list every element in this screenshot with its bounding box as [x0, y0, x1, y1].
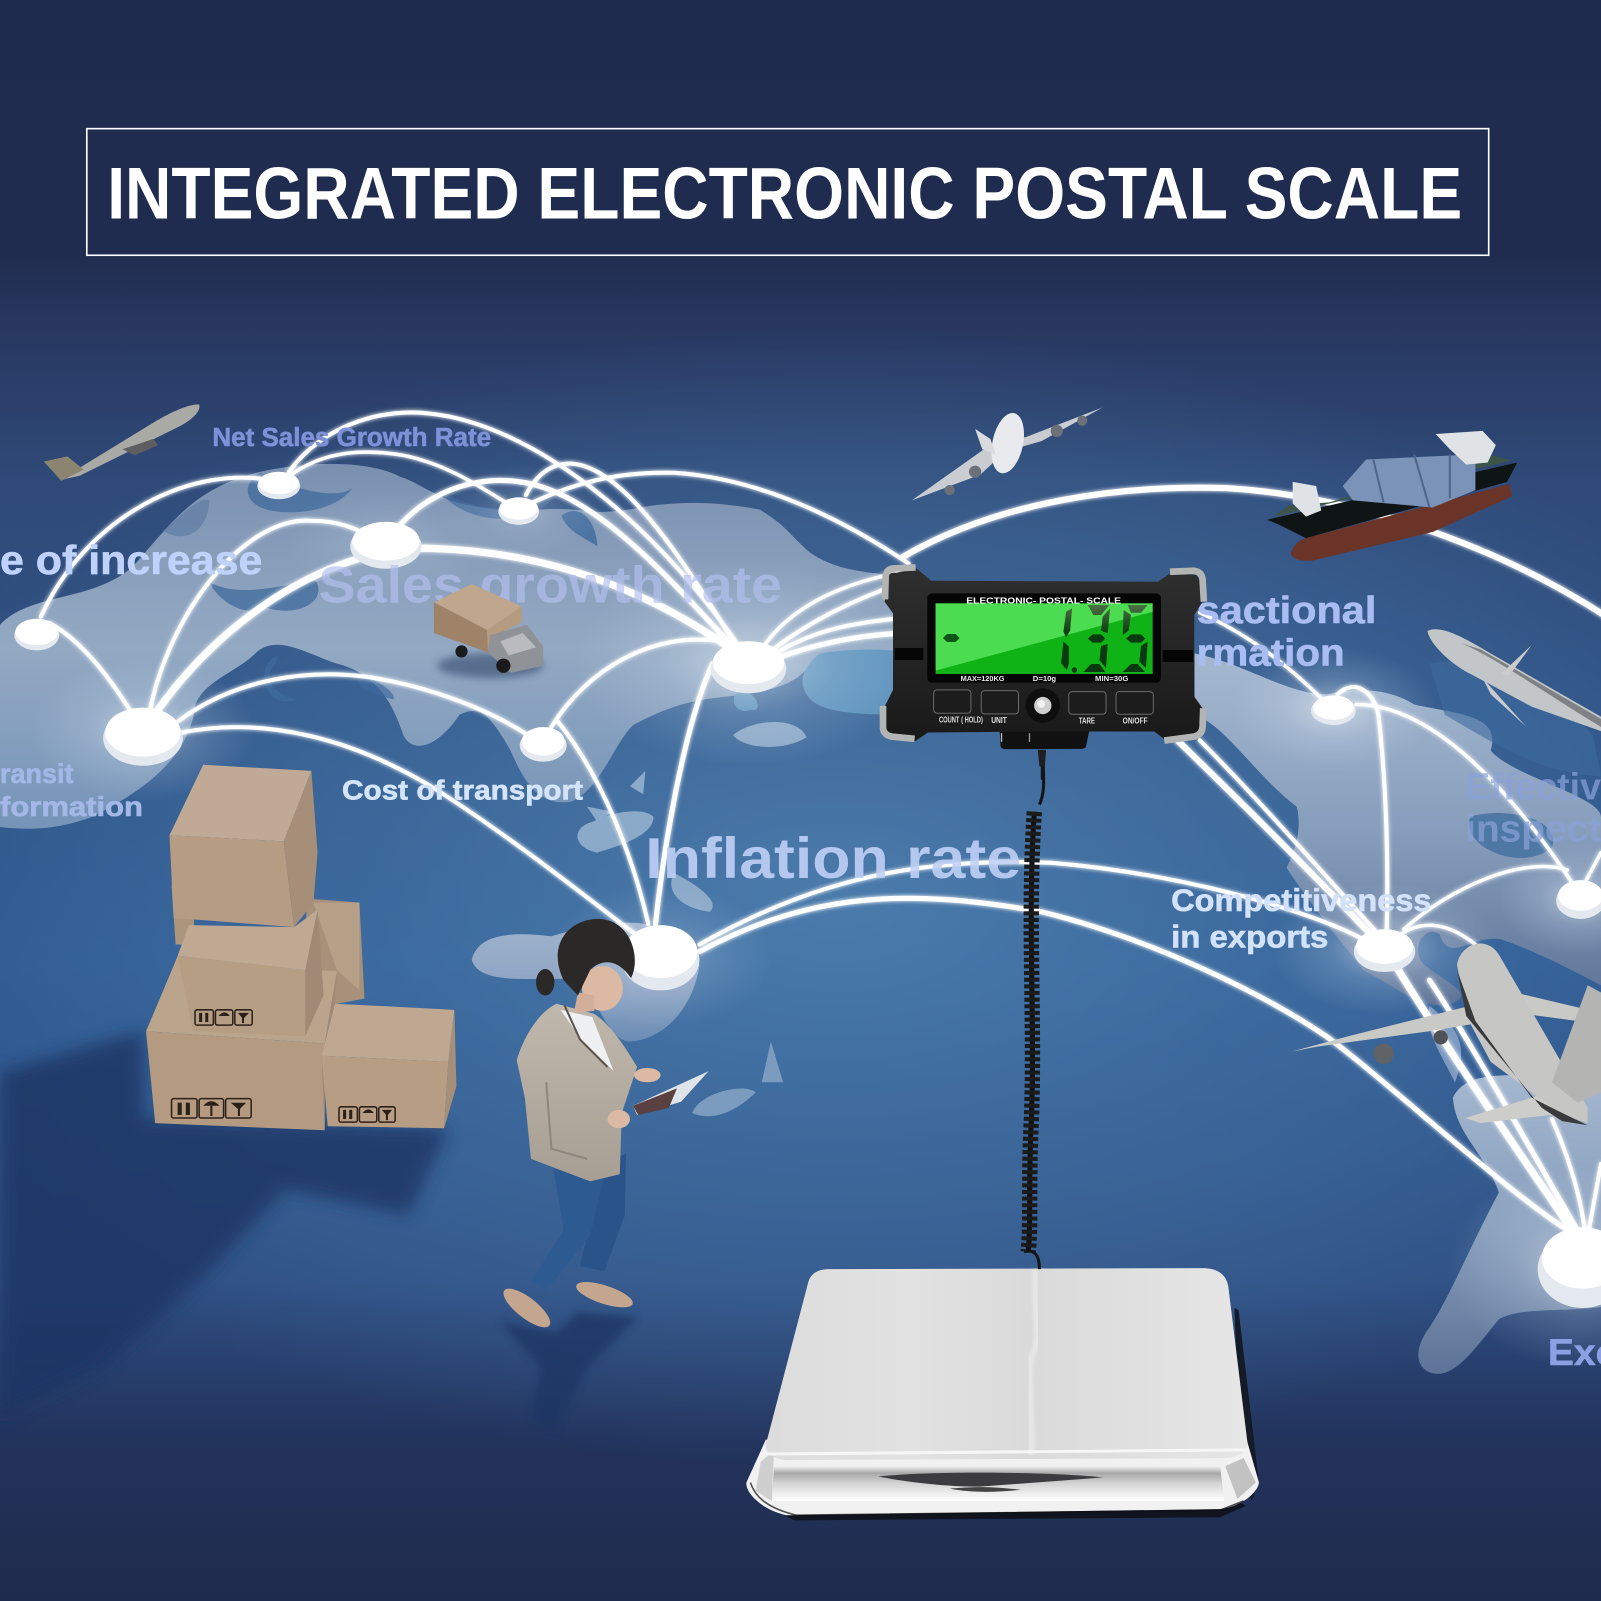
map labels: Effectiv: [1465, 766, 1601, 808]
map labels: Competitiveness: [1171, 882, 1432, 918]
title banner: [87, 129, 1489, 255]
map labels: in exports: [1171, 919, 1328, 955]
button labels: TARE: [1079, 716, 1095, 726]
icon: airplane top centre: [912, 407, 1103, 500]
icon: airplane top left: [44, 404, 199, 481]
map labels: e of increase: [0, 537, 262, 583]
corner bumpers: [883, 567, 1204, 741]
control buttons: [934, 690, 1153, 714]
coiled cable: [1024, 750, 1044, 1269]
network hub nodes: [14, 472, 1601, 1308]
map labels: inspect: [1465, 808, 1601, 850]
icon: large airplane: [1292, 944, 1601, 1125]
centre knob: [1025, 688, 1060, 723]
world map continents: [0, 464, 1601, 1374]
lcd bezel: [927, 593, 1161, 683]
icon: delivery truck: [434, 584, 543, 678]
button labels: UNIT: [991, 715, 1007, 725]
woman with tablet: [498, 919, 709, 1429]
network arcs: [41, 412, 1601, 1230]
button labels: ON/OFF: [1123, 716, 1148, 726]
scale display unit: [883, 567, 1204, 780]
side bands: [895, 648, 1193, 662]
map labels: sactional: [1197, 590, 1376, 632]
lcd specs: [961, 676, 1128, 683]
lcd specs: MAX=120KG: [961, 676, 1005, 683]
button labels: COUNT ( HOLD): [939, 715, 983, 725]
lcd specs: MIN=30G: [1095, 676, 1128, 683]
scale weighing platform: [746, 1268, 1259, 1520]
lcd heading: ELECTRONIC- POSTAL- SCALE: [966, 595, 1122, 605]
cardboard boxes: [0, 765, 456, 1419]
map labels: formation: [0, 791, 143, 822]
map labels: ransit: [0, 758, 74, 789]
map labels: Inflation rate: [645, 827, 1021, 891]
map labels: Sales growth rate: [319, 556, 782, 614]
map labels: [0, 424, 1601, 1373]
lcd screen: [936, 603, 1153, 674]
icon: airplane right: [1427, 629, 1601, 731]
map labels: Cost of transport: [342, 774, 583, 805]
lcd digits reading 1.35: [943, 605, 1148, 673]
map labels: rmation: [1197, 633, 1345, 675]
button labels: [939, 715, 1148, 726]
lcd specs: D=10g: [1033, 676, 1056, 683]
cable connector: [1000, 730, 1089, 780]
icon: container ship: [1267, 431, 1517, 561]
map labels: Net Sales Growth Rate: [212, 424, 491, 452]
device body: [883, 568, 1203, 742]
